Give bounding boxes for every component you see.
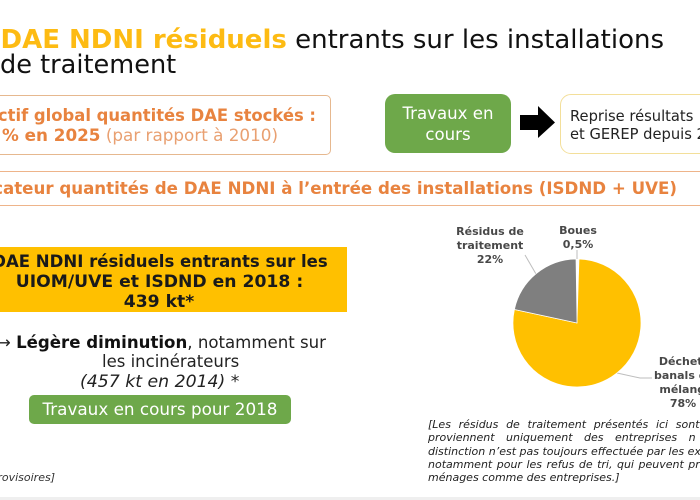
leader lines <box>525 250 652 378</box>
footnote: résidus de traitement <box>428 418 700 484</box>
pie chart <box>456 224 700 410</box>
arrow <box>520 106 555 138</box>
text block: trend: les incinérateurs <box>102 352 239 371</box>
labels: Boues <box>559 224 597 237</box>
panel: objectif global <box>0 95 331 155</box>
labels: traitement <box>457 239 523 252</box>
panel: travaux en cours: cours <box>425 124 471 144</box>
footnote: résidus de traitement: notamment pour les refus de tri, qui peuvent pr <box>428 458 700 471</box>
labels <box>456 224 700 410</box>
slice: déchets banals <box>513 259 641 387</box>
labels: 0,5% <box>563 238 593 251</box>
footnote: résidus de traitement: proviennent uniquement des entreprises n <box>428 431 696 444</box>
panel: key figure: DAE NDNI résiduels entrants sur les <box>0 252 328 271</box>
panel: key figure: 439 kt* <box>124 292 194 312</box>
slice: résidus de traitement <box>514 259 577 323</box>
panel: travaux en cours <box>385 94 511 153</box>
bottom band <box>0 497 700 500</box>
panel: key figure: UIOM/UVE et ISDND en 2018 : <box>16 272 303 292</box>
labels: 78% <box>670 397 696 410</box>
footnote: résidus de traitement: [Les résidus de traitement présentés ici sont <box>428 418 700 431</box>
panel: key figure <box>0 247 347 312</box>
panel: reprise résultats: Reprise résultats <box>570 108 693 125</box>
footnote: résidus de traitement: distinction n’est pas toujours effectuée par les ex <box>428 445 700 458</box>
panel: reprise résultats <box>560 94 700 154</box>
title: de traitement <box>0 50 176 80</box>
text block: trend <box>0 333 326 392</box>
text block: trend: (457 kt en 2014) * <box>80 372 239 392</box>
text block: trend: → Légère diminution, notamment sur <box>0 333 326 352</box>
labels: Résidus de <box>456 225 524 238</box>
footnote: résidus de traitement: ménages comme des entreprises.] <box>428 471 620 484</box>
panel: travaux en cours: Travaux en <box>402 104 494 123</box>
callout: travaux en cours pour 2018: Travaux en cours pour 2018 <box>42 399 277 419</box>
panel: objectif global: % en 2025 (par rapport à 2010) <box>2 125 278 145</box>
labels: 22% <box>477 253 503 266</box>
indicator heading band <box>0 171 700 206</box>
title <box>0 26 664 80</box>
callout: travaux en cours pour 2018 <box>29 395 291 424</box>
